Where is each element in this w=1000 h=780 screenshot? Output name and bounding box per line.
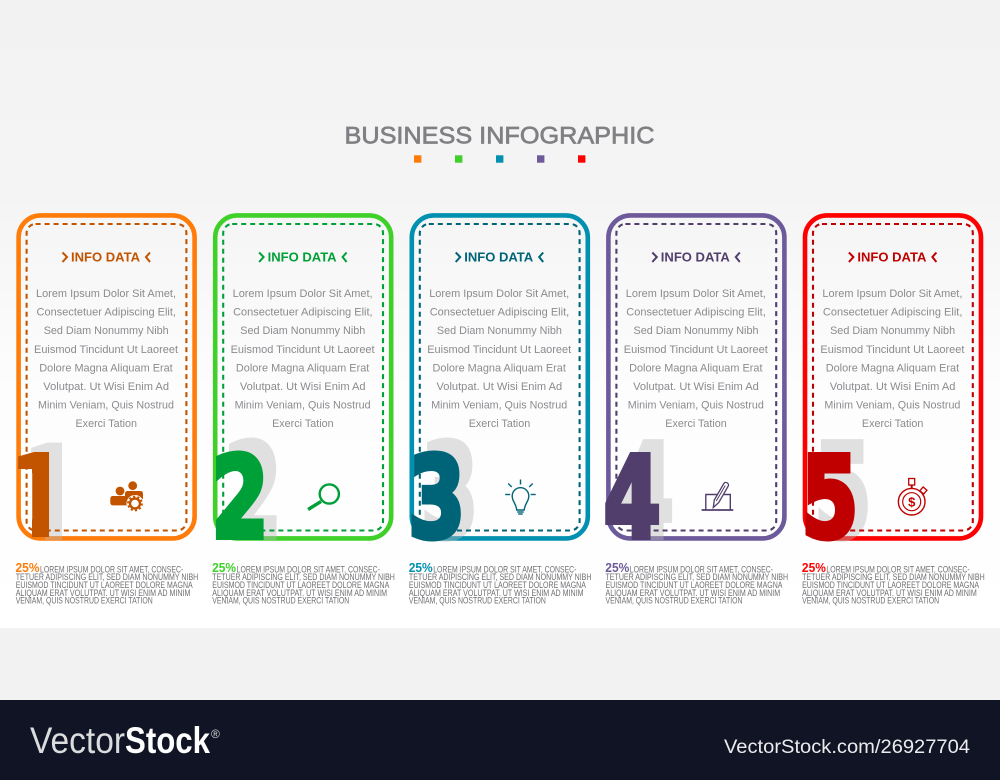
- body text: Volutpat. Ut Wisi Enim Ad: [437, 381, 562, 393]
- body text: Lorem Ipsum Dolor Sit Amet,: [233, 288, 373, 300]
- body text: Euismod Tincidunt Ut Laoreet: [34, 344, 178, 356]
- body text: Exerci Tation: [862, 418, 923, 430]
- numeral 1: 1: [11, 435, 69, 564]
- body text: Lorem Ipsum Dolor Sit Amet,: [36, 288, 176, 300]
- caption: VENIAM, QUIS NOSTRUD EXERCI TATION: [16, 596, 153, 606]
- body text: [624, 288, 768, 430]
- body text: Lorem Ipsum Dolor Sit Amet,: [822, 288, 962, 300]
- caption: VENIAM, QUIS NOSTRUD EXERCI TATION: [802, 596, 939, 606]
- caption: EUISMOD TINCIDUNT UT LAOREET DOLORE MAGNA: [16, 580, 193, 590]
- caption: TETUER ADIPISCING ELIT, SED DIAM NONUMMY NIBH: [212, 572, 395, 582]
- panel: step 4: [604, 215, 788, 606]
- body text: Consectetuer Adipiscing Elit,: [233, 307, 373, 319]
- body text: Volutpat. Ut Wisi Enim Ad: [830, 381, 955, 393]
- body text: Euismod Tincidunt Ut Laoreet: [820, 344, 964, 356]
- body text: Minim Veniam, Quis Nostrud: [628, 400, 764, 412]
- body text: Dolore Magna Aliquam Erat: [629, 362, 762, 374]
- footer logo: [30, 720, 220, 761]
- caption: [212, 561, 395, 606]
- caption: 25%: [409, 561, 433, 575]
- caption: VENIAM, QUIS NOSTRUD EXERCI TATION: [212, 596, 349, 606]
- body text: Minim Veniam, Quis Nostrud: [38, 400, 174, 412]
- numeral shadow 5: 5: [814, 418, 871, 568]
- caption: 25%: [605, 561, 629, 575]
- icon: light bulb: [505, 480, 536, 514]
- card outline: [412, 215, 588, 538]
- footer bar: [0, 700, 1000, 780]
- caption: EUISMOD TINCIDUNT UT LAOREET DOLORE MAGNA: [605, 580, 783, 590]
- icon: team settings: [110, 481, 144, 512]
- caption: ALIQUAM ERAT VOLUTPAT. UT WISI ENIM AD MINIM: [16, 588, 190, 598]
- card outline: [19, 215, 195, 538]
- panel: step 2: [212, 215, 395, 606]
- body text: Exerci Tation: [272, 418, 334, 430]
- footer logo: Vector: [30, 720, 125, 761]
- body text: Consectetuer Adipiscing Elit,: [626, 307, 766, 319]
- numeral 3: 3: [408, 434, 465, 564]
- caption: TETUER ADIPISCING ELIT, SED DIAM NONUMMY NIBH: [605, 572, 788, 582]
- icon: magnifier: [308, 484, 339, 510]
- footer image id: VectorStock.com/26927704: [724, 737, 970, 758]
- card outline: [215, 215, 391, 538]
- body text: [820, 288, 964, 430]
- body text: Lorem Ipsum Dolor Sit Amet,: [429, 288, 569, 300]
- body text: Exerci Tation: [469, 418, 530, 430]
- caption: VENIAM, QUIS NOSTRUD EXERCI TATION: [409, 596, 546, 606]
- colour key squares: [414, 155, 585, 163]
- numeral shadow 4: 4: [617, 418, 674, 568]
- caption: [605, 561, 788, 606]
- panel: step 5: [801, 215, 985, 606]
- caption: LOREM IPSUM DOLOR SIT AMET, CONSEC-: [630, 564, 773, 574]
- icon: laptop and pencil: [702, 482, 733, 510]
- heading: info data: INFO DATA: [464, 250, 534, 265]
- body text: Volutpat. Ut Wisi Enim Ad: [240, 381, 366, 393]
- caption: VENIAM, QUIS NOSTRUD EXERCI TATION: [605, 596, 742, 606]
- icon: stopwatch with dollar: $: [908, 494, 916, 510]
- caption: 25%: [16, 561, 40, 575]
- caption: ALIQUAM ERAT VOLUTPAT. UT WISI ENIM AD MINIM: [409, 588, 584, 598]
- heading: info data: INFO DATA: [661, 250, 730, 265]
- card outline: [608, 215, 784, 538]
- body text: Exerci Tation: [76, 418, 137, 430]
- caption: LOREM IPSUM DOLOR SIT AMET, CONSEC-: [433, 564, 577, 574]
- icon: stopwatch with dollar: [898, 478, 927, 515]
- heading: info data: INFO DATA: [268, 250, 337, 265]
- body text: Dolore Magna Aliquam Erat: [236, 362, 369, 374]
- body text: [427, 288, 571, 430]
- caption: EUISMOD TINCIDUNT UT LAOREET DOLORE MAGNA: [212, 580, 389, 590]
- body text: Sed Diam Nonummy Nibh: [240, 325, 365, 337]
- caption: ALIQUAM ERAT VOLUTPAT. UT WISI ENIM AD MINIM: [605, 588, 780, 598]
- body text: [231, 288, 375, 430]
- body text: Euismod Tincidunt Ut Laoreet: [624, 344, 768, 356]
- heading: info data: INFO DATA: [857, 250, 927, 265]
- body text: Sed Diam Nonummy Nibh: [633, 325, 758, 337]
- numeral 2: 2: [212, 434, 268, 564]
- numeral shadow 1: 1: [24, 420, 82, 571]
- body text: [34, 288, 178, 430]
- caption: 25%: [212, 561, 236, 575]
- caption: 25%: [802, 561, 826, 575]
- numeral shadow 3: 3: [421, 418, 478, 568]
- panel: step 3: [408, 215, 592, 606]
- body text: Dolore Magna Aliquam Erat: [39, 362, 173, 374]
- body text: Volutpat. Ut Wisi Enim Ad: [633, 381, 759, 393]
- caption: LOREM IPSUM DOLOR SIT AMET, CONSEC-: [40, 564, 183, 574]
- caption: LOREM IPSUM DOLOR SIT AMET, CONSEC-: [237, 564, 380, 574]
- caption: [802, 561, 985, 606]
- body text: Consectetuer Adipiscing Elit,: [823, 307, 962, 319]
- body text: Exerci Tation: [665, 418, 727, 430]
- body text: Sed Diam Nonummy Nibh: [830, 325, 955, 337]
- body text: Euismod Tincidunt Ut Laoreet: [231, 344, 375, 356]
- body text: Sed Diam Nonummy Nibh: [437, 325, 562, 337]
- body text: Dolore Magna Aliquam Erat: [433, 362, 566, 374]
- caption: TETUER ADIPISCING ELIT, SED DIAM NONUMMY NIBH: [16, 572, 198, 582]
- card outline: [805, 215, 981, 538]
- body text: Minim Veniam, Quis Nostrud: [824, 400, 960, 412]
- heading: info data: INFO DATA: [71, 250, 141, 265]
- numeral 5: 5: [801, 434, 858, 564]
- body text: Euismod Tincidunt Ut Laoreet: [427, 344, 571, 356]
- body text: Sed Diam Nonummy Nibh: [44, 325, 169, 337]
- title: BUSINESS INFOGRAPHIC: [344, 122, 654, 150]
- footer logo: ®: [211, 727, 220, 741]
- body text: Dolore Magna Aliquam Erat: [826, 362, 959, 374]
- caption: [16, 561, 198, 606]
- body text: Minim Veniam, Quis Nostrud: [431, 400, 567, 412]
- caption: EUISMOD TINCIDUNT UT LAOREET DOLORE MAGNA: [409, 580, 586, 590]
- body text: Lorem Ipsum Dolor Sit Amet,: [626, 288, 766, 300]
- caption: TETUER ADIPISCING ELIT, SED DIAM NONUMMY NIBH: [409, 572, 592, 582]
- numeral 4: 4: [604, 434, 661, 564]
- body text: Minim Veniam, Quis Nostrud: [235, 400, 371, 412]
- caption: [409, 561, 592, 606]
- body text: Consectetuer Adipiscing Elit,: [36, 307, 176, 319]
- panel: step 1: [11, 215, 198, 606]
- caption: ALIQUAM ERAT VOLUTPAT. UT WISI ENIM AD MINIM: [212, 588, 387, 598]
- numeral shadow 2: 2: [225, 418, 281, 568]
- body text: Volutpat. Ut Wisi Enim Ad: [43, 381, 169, 393]
- body text: Consectetuer Adipiscing Elit,: [430, 307, 569, 319]
- footer logo: Stock: [125, 720, 210, 761]
